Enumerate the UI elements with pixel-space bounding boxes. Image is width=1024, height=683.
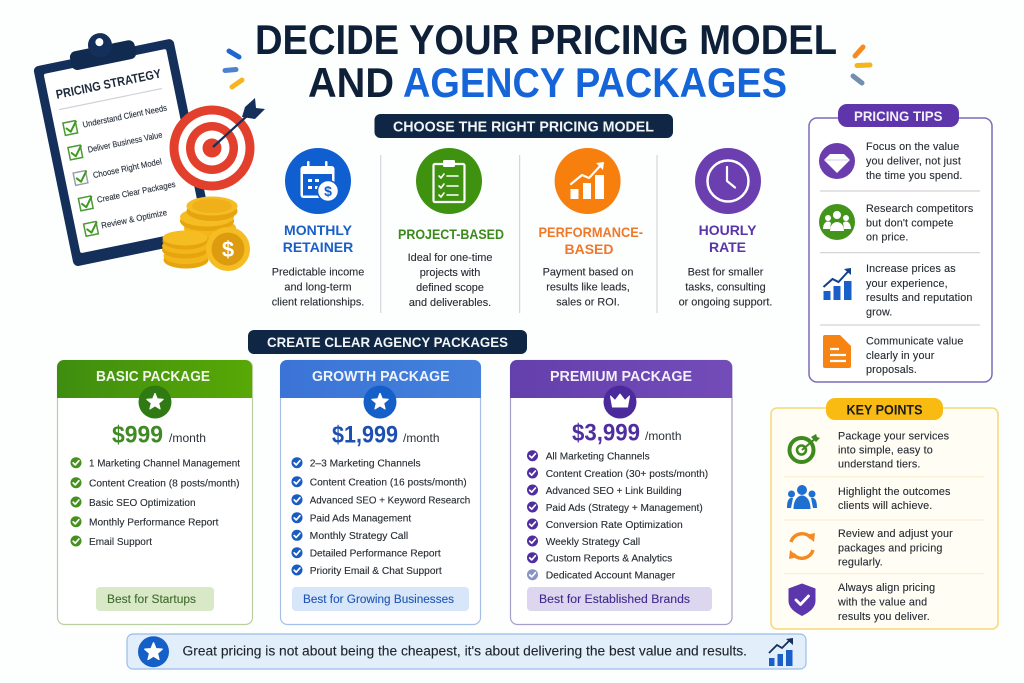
description: Best for smaller	[688, 267, 764, 279]
title	[255, 16, 837, 106]
checklist: Create Clear Packages	[96, 179, 176, 205]
tip: increase prices: Increase prices as	[866, 263, 956, 275]
price	[332, 422, 440, 448]
feature list: 1 Marketing Channel Management	[89, 458, 240, 470]
heading	[283, 222, 353, 255]
icon: growth chart	[555, 148, 621, 214]
icon: sync arrows	[789, 533, 815, 559]
description	[679, 267, 772, 309]
feature list: Advanced SEO + Keyword Research	[310, 496, 470, 506]
feature list	[70, 457, 240, 548]
icon: shield	[788, 584, 816, 616]
point: align	[788, 582, 935, 623]
pricing tips heading: PRICING TIPS	[854, 108, 942, 124]
heading: choose the right pricing model: CHOOSE THE RIGHT PRICING MODEL	[393, 120, 654, 136]
tip: competitors: Research competitors	[866, 203, 974, 215]
feature list	[527, 450, 708, 582]
point: outcomes: Highlight the outcomes	[838, 486, 951, 498]
point: review: Review and adjust your	[838, 528, 953, 540]
heading	[699, 222, 757, 255]
feature list: Custom Reports & Analytics	[546, 554, 672, 564]
key points heading: KEY POINTS	[846, 402, 922, 418]
feature list: Basic SEO Optimization	[89, 498, 196, 509]
price	[572, 420, 682, 446]
title: AND	[308, 59, 394, 106]
checklist: Understand Client Needs	[82, 103, 168, 130]
tip: value: you deliver, not just	[866, 155, 961, 167]
tip: communicate: clearly in your	[866, 350, 935, 362]
title: AGENCY PACKAGES	[403, 59, 787, 106]
tip: communicate	[823, 335, 963, 376]
panel: key points	[771, 398, 998, 629]
panel: project-based	[398, 148, 504, 309]
feature list: All Marketing Channels	[546, 452, 650, 462]
feature list: 2–3 Marketing Channels	[310, 458, 421, 470]
point: package: Package your services	[838, 430, 950, 442]
clipboard heading: PRICING STRATEGY	[55, 66, 163, 102]
tag: best for growing businesses: Best for Growing Businesses	[303, 594, 454, 606]
icon: target with arrow	[170, 98, 265, 190]
feature list: Dedicated Account Manager	[546, 570, 676, 582]
price: /month	[645, 429, 682, 443]
heading: HOURLY	[699, 222, 757, 238]
heading: create clear agency packages: CREATE CLEAR AGENCY PACKAGES	[267, 334, 508, 350]
tip: competitors	[819, 203, 974, 244]
price: $999	[112, 422, 163, 448]
icon: star badge	[138, 386, 172, 418]
description: projects with	[420, 267, 480, 279]
description	[543, 267, 633, 309]
header: PREMIUM PACKAGE	[550, 369, 692, 385]
description: client relationships.	[272, 297, 364, 309]
tip: communicate: proposals.	[866, 364, 917, 376]
icon: calendar with dollar	[285, 148, 351, 214]
heading: RETAINER	[283, 239, 353, 255]
tip: competitors: but don't compete	[866, 218, 954, 230]
description: Ideal for one-time	[408, 252, 492, 264]
feature list: Email Support	[89, 537, 152, 548]
point: align: Always align pricing	[838, 582, 935, 594]
icon: coin stacks: $	[222, 237, 234, 262]
point: package: understand tiers.	[838, 459, 920, 471]
feature list: Advanced SEO + Link Building	[546, 486, 682, 497]
feature list: Conversion Rate Optimization	[546, 520, 683, 531]
price: /month	[169, 431, 206, 445]
price: $1,999	[332, 422, 398, 448]
feature list	[292, 457, 470, 577]
feature list: Priority Email & Chat Support	[310, 566, 442, 577]
panel: growth package	[280, 360, 481, 624]
tag: best for growing businesses	[292, 587, 469, 611]
description: Predictable income	[272, 267, 364, 279]
point: review: packages and pricing	[838, 543, 942, 555]
tag: best for startups	[96, 587, 214, 611]
point: package: into simple, easy to	[838, 445, 933, 457]
feature list: Paid Ads Management	[310, 514, 411, 524]
icon: document	[823, 335, 851, 368]
icon: checklist clipboard	[416, 148, 482, 214]
feature list: Monthly Strategy Call	[310, 531, 408, 542]
checklist	[63, 102, 189, 236]
point: align: with the value and	[837, 597, 927, 609]
description: or ongoing support.	[679, 297, 772, 309]
tip: value: Focus on the value	[866, 141, 959, 153]
tip: value	[819, 141, 963, 182]
title: DECIDE YOUR PRICING MODEL	[255, 16, 837, 63]
illustration: clipboard with target and coins	[29, 19, 265, 271]
icon: star badge	[364, 386, 396, 418]
checklist: Deliver Business Value	[87, 129, 163, 155]
price	[112, 422, 206, 448]
panel: basic package	[57, 360, 252, 624]
icon: target	[790, 434, 820, 462]
header	[57, 360, 252, 398]
tip: value: the time you spend.	[866, 170, 963, 182]
icon: crown badge	[604, 386, 636, 418]
feature list: Content Creation (8 posts/month)	[89, 478, 240, 490]
point: package	[790, 430, 950, 471]
tip: communicate: Communicate value	[866, 336, 963, 348]
icon: clock	[695, 148, 761, 214]
point: outcomes	[787, 485, 951, 512]
icon: growth chart	[769, 638, 793, 666]
description	[408, 252, 492, 309]
feature list: Content Creation (16 posts/month)	[310, 478, 467, 488]
panel: performance-based	[538, 148, 643, 309]
description	[272, 267, 364, 309]
description: results like leads,	[546, 282, 630, 294]
tip: increase prices: results and reputation	[866, 292, 972, 304]
panel: pricing tips	[809, 104, 992, 382]
tag: best for established brands	[527, 587, 712, 611]
icon: diamond	[819, 143, 855, 179]
header	[280, 360, 481, 398]
panel: premium package	[510, 360, 732, 624]
feature list: Paid Ads (Strategy + Management)	[546, 503, 703, 514]
tag: best for established brands: Best for Established Brands	[539, 594, 690, 606]
point: align: results you deliver.	[838, 611, 930, 623]
description: tasks, consulting	[685, 282, 766, 294]
heading: PERFORMANCE-	[538, 224, 643, 240]
checklist: Review & Optimize	[100, 207, 168, 230]
tip: competitors: on price.	[866, 232, 908, 244]
icon: star	[138, 636, 169, 667]
feature list: Detailed Performance Report	[310, 548, 441, 560]
header: BASIC PACKAGE	[96, 369, 210, 385]
feature list: Content Creation (30+ posts/month)	[546, 469, 708, 480]
panel: hourly rate	[679, 148, 772, 309]
point: review: regularly.	[838, 557, 883, 569]
point: review	[789, 528, 953, 569]
icon: calendar with dollar: $	[324, 183, 332, 199]
header: GROWTH PACKAGE	[312, 369, 450, 385]
heading: BASED	[564, 241, 614, 257]
pricing tips heading	[838, 104, 959, 127]
heading: MONTHLY	[284, 222, 353, 238]
tag: best for startups: Best for Startups	[107, 594, 196, 606]
heading: RATE	[709, 239, 746, 255]
price: /month	[403, 431, 440, 445]
description: and deliverables.	[409, 297, 491, 309]
header	[510, 360, 732, 398]
price: $3,999	[572, 420, 640, 446]
description: sales or ROI.	[556, 297, 620, 309]
heading: create clear agency packages	[248, 330, 527, 354]
heading: choose the right pricing model	[374, 114, 673, 138]
decorative accents beside title	[225, 47, 870, 87]
description: Payment based on	[543, 267, 633, 279]
heading	[538, 224, 643, 257]
callout: bottom banner	[127, 634, 806, 669]
icon: coin stacks	[162, 196, 250, 271]
tip: increase prices	[824, 263, 972, 319]
panel: monthly retainer	[272, 148, 364, 309]
description: and long-term	[284, 282, 352, 294]
point: outcomes: clients will achieve.	[838, 500, 932, 512]
tip: increase prices: grow.	[866, 307, 892, 319]
feature list: Weekly Strategy Call	[546, 537, 640, 548]
feature list: Monthly Performance Report	[89, 518, 219, 528]
icon: people	[787, 485, 817, 509]
checklist: Choose Right Model	[92, 156, 163, 180]
tip: increase prices: your experience,	[866, 278, 948, 290]
key points heading	[826, 398, 943, 420]
icon: blue chart	[824, 268, 852, 300]
icon: team	[819, 204, 855, 240]
banner text: Great pricing is not about being the cheapest, it's about delivering the best value and results.	[182, 644, 747, 659]
clipboard	[29, 19, 214, 267]
heading: PROJECT-BASED	[398, 226, 504, 242]
description: defined scope	[416, 282, 484, 294]
